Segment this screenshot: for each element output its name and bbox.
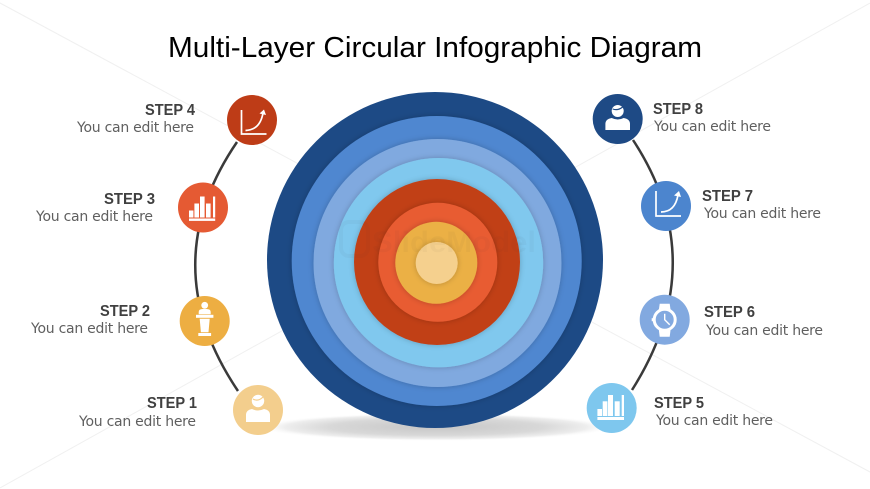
- label: step 8: You can edit here: [653, 119, 771, 135]
- label: step 4: [76, 102, 195, 136]
- icon: growth chart: [227, 95, 277, 145]
- label: step 5: STEP 5: [654, 395, 704, 412]
- label: step 3: [35, 191, 155, 225]
- label: step 7: You can edit here: [703, 206, 821, 222]
- icon: watch: [640, 295, 690, 345]
- label: step 3: STEP 3: [104, 191, 155, 208]
- label: step 8: STEP 8: [653, 101, 703, 118]
- icon: person: [233, 385, 283, 435]
- step 1: [78, 385, 283, 435]
- label: step 2: STEP 2: [100, 303, 150, 320]
- icon: person: [593, 94, 643, 144]
- label: step 4: You can edit here: [76, 120, 194, 136]
- step 2: [30, 296, 230, 346]
- label: step 6: You can edit here: [705, 323, 823, 339]
- label: step 4: STEP 4: [145, 102, 195, 119]
- step 6: [640, 295, 823, 345]
- concentric circle diagram: [267, 92, 603, 428]
- step 5: [587, 383, 773, 433]
- step 4: [76, 95, 277, 145]
- label: step 1: [78, 395, 197, 430]
- icon: bar chart: [178, 182, 228, 232]
- step 7: [641, 181, 821, 231]
- label: step 2: You can edit here: [30, 321, 148, 337]
- title: Multi-Layer Circular Infographic Diagram: [168, 32, 702, 64]
- label: step 6: [704, 304, 823, 339]
- label: step 1: STEP 1: [147, 395, 197, 412]
- label: step 2: [30, 303, 150, 337]
- label: step 3: You can edit here: [35, 209, 153, 225]
- label: step 5: You can edit here: [655, 413, 773, 429]
- step 3: [35, 182, 228, 232]
- connector arc: left: [195, 142, 238, 391]
- label: step 7: STEP 7: [702, 188, 753, 205]
- label: step 7: [702, 188, 821, 222]
- label: step 1: You can edit here: [78, 414, 196, 430]
- watermark: SlideModel: [372, 226, 536, 259]
- ground shadow: [258, 413, 614, 441]
- step 8: [593, 94, 771, 144]
- icon: growth chart: [641, 181, 691, 231]
- icon: bar chart: [587, 383, 637, 433]
- label: step 6: STEP 6: [704, 304, 755, 321]
- label: step 8: [653, 101, 771, 135]
- label: step 5: [654, 395, 773, 429]
- icon: podium: [180, 296, 230, 346]
- connector arc: right: [632, 140, 673, 390]
